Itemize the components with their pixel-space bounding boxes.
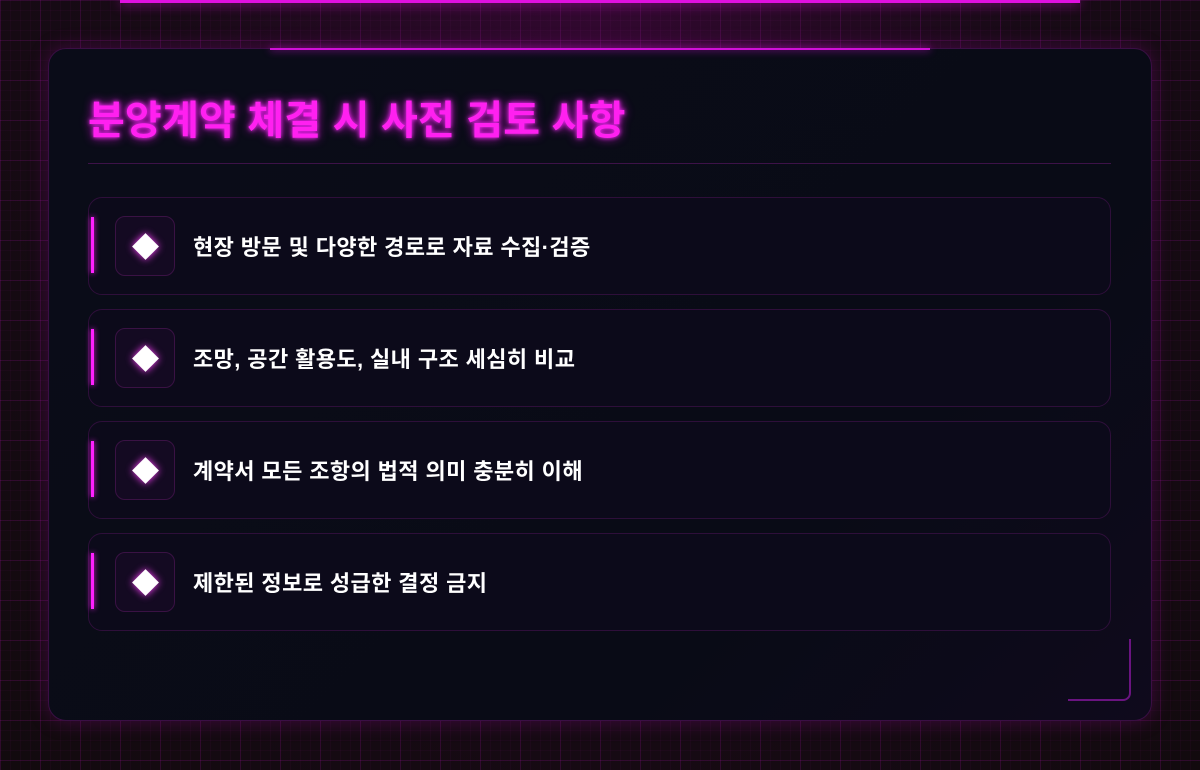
item 3 — [88, 421, 1111, 519]
text 4: 제한된 정보로 성급한 결정 금지 — [193, 571, 487, 596]
text 2: 조망, 공간 활용도, 실내 구조 세심히 비교 — [193, 347, 575, 372]
item 1 — [88, 197, 1111, 295]
text 1: 현장 방문 및 다양한 경로로 자료 수집·검증 — [193, 235, 591, 260]
icon: diamond — [115, 328, 175, 388]
icon: diamond — [115, 216, 175, 276]
corner accent — [1068, 639, 1131, 701]
icon: diamond — [115, 552, 175, 612]
title: 분양계약 체결 시 사전 검토 사항 — [88, 99, 626, 143]
item 2 — [88, 309, 1111, 407]
text 3: 계약서 모든 조항의 법적 의미 충분히 이해 — [193, 459, 583, 484]
item 4 — [88, 533, 1111, 631]
icon: diamond — [115, 440, 175, 500]
